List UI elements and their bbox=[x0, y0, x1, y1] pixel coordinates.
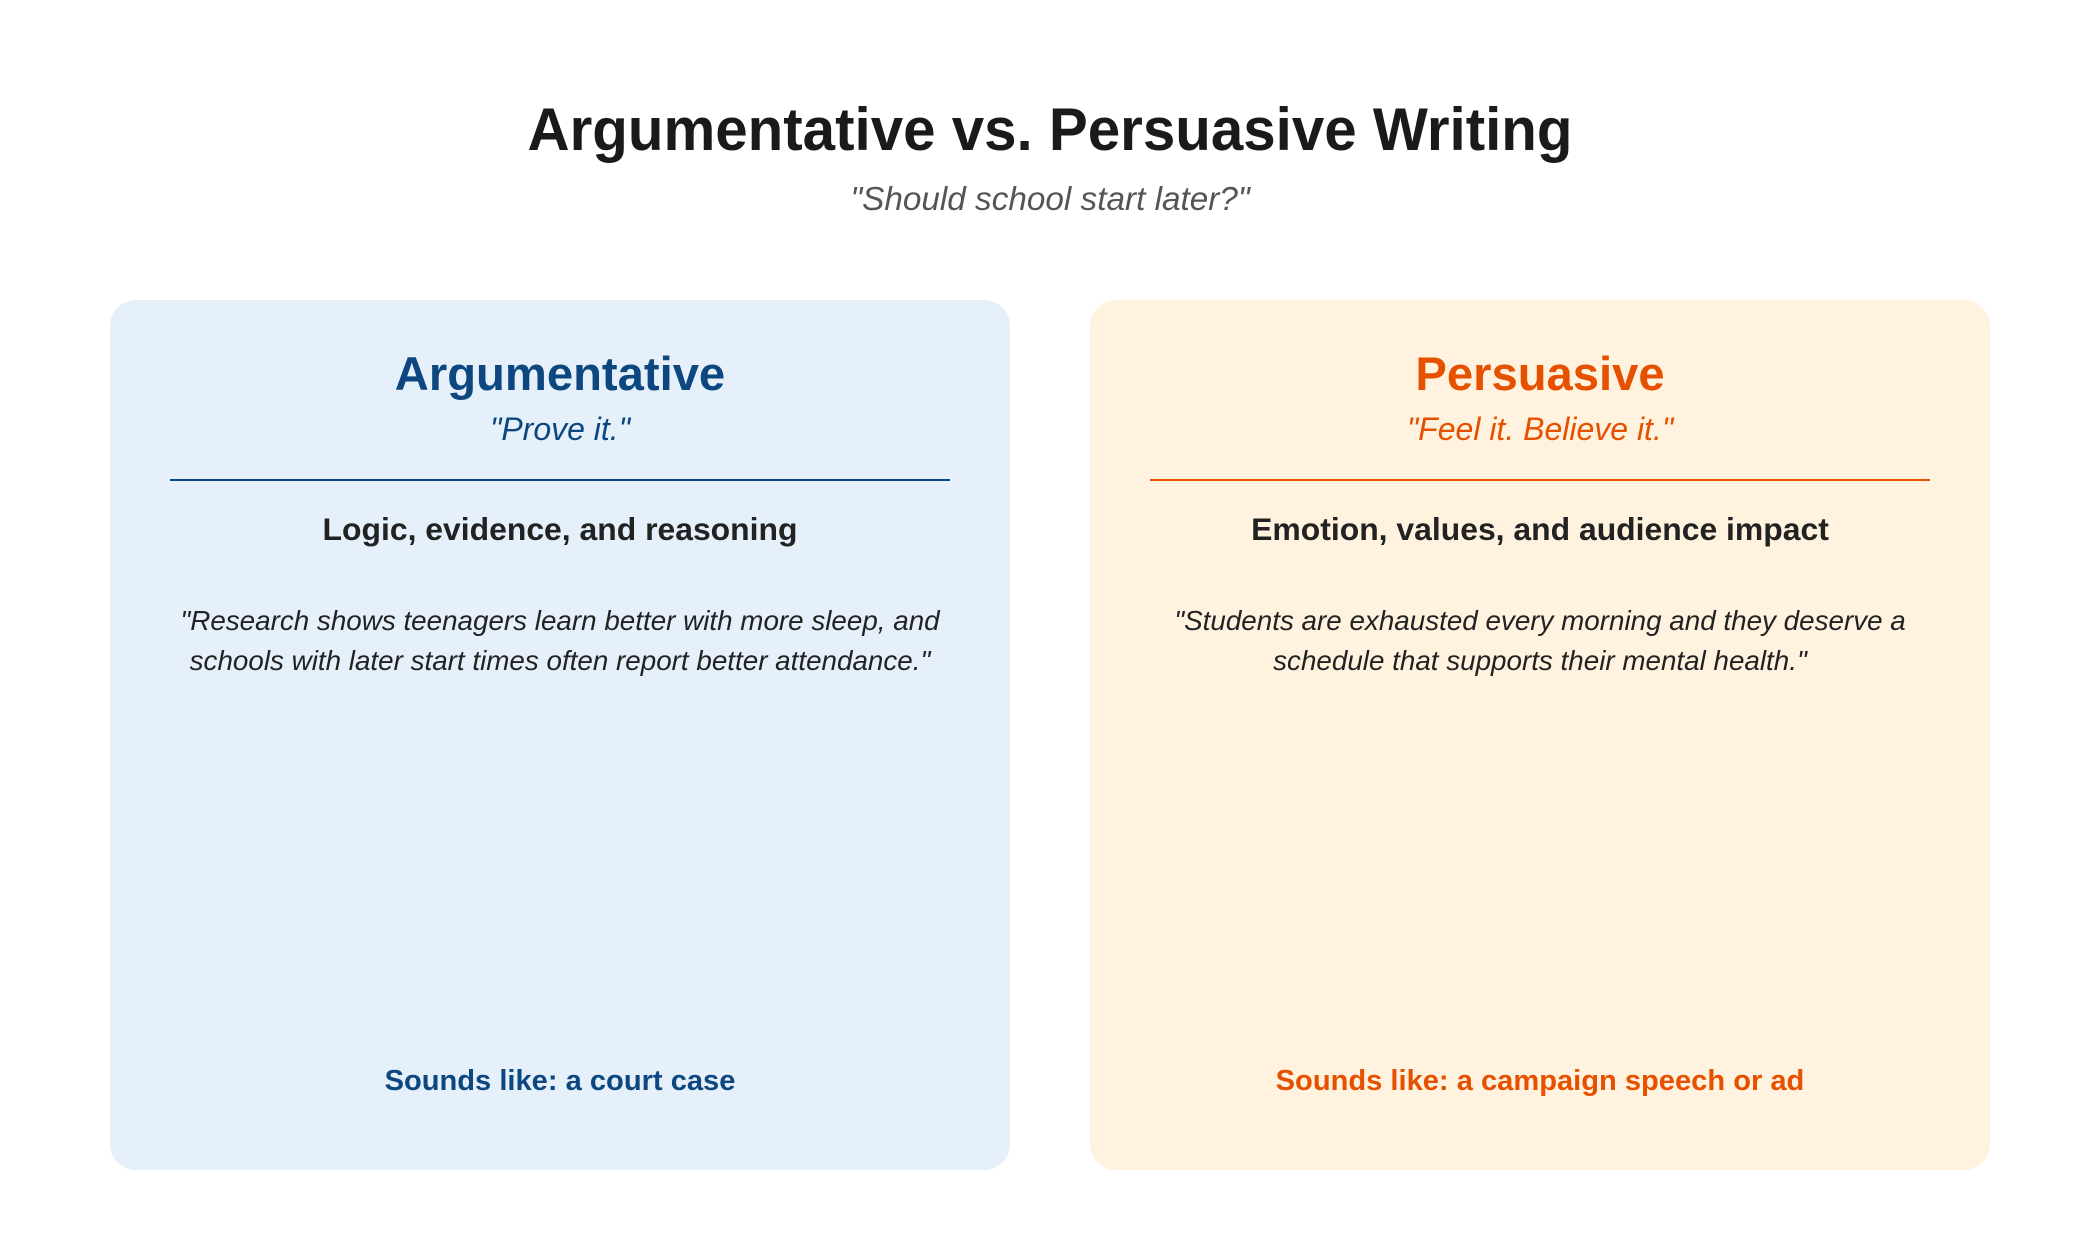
panel heading: persuasive: Persuasive bbox=[1415, 348, 1665, 401]
example quote: argumentative bbox=[180, 605, 941, 676]
example quote: persuasive: "Students are exhausted every morning and they deserve a bbox=[1174, 605, 1906, 636]
tagline: prove it: "Prove it." bbox=[490, 411, 632, 447]
example quote: argumentative: schools with later start times often report better attendance." bbox=[190, 645, 931, 676]
example quote: argumentative: "Research shows teenagers learn better with more sleep, and bbox=[180, 605, 941, 636]
panel: persuasive bbox=[1090, 300, 1990, 1170]
focus: emotion, values, and audience impact: Emotion, values, and audience impact bbox=[1251, 511, 1829, 547]
panel: argumentative bbox=[110, 300, 1010, 1170]
example quote: persuasive bbox=[1174, 605, 1906, 676]
tagline: feel it, believe it: "Feel it. Believe it." bbox=[1407, 411, 1675, 447]
title: Argumentative vs. Persuasive Writing bbox=[528, 96, 1572, 163]
sounds like: court case: Sounds like: a court case bbox=[385, 1065, 735, 1097]
example quote: persuasive: schedule that supports their mental health." bbox=[1273, 645, 1808, 676]
subtitle: "Should school start later?" bbox=[850, 181, 1252, 218]
sounds like: campaign speech or ad: Sounds like: a campaign speech or ad bbox=[1276, 1065, 1804, 1097]
panel heading: argumentative: Argumentative bbox=[395, 348, 725, 401]
panel background: persuasive bbox=[1090, 300, 1990, 1170]
focus: logic, evidence, and reasoning: Logic, evidence, and reasoning bbox=[323, 511, 797, 547]
panel background: argumentative bbox=[110, 300, 1010, 1170]
